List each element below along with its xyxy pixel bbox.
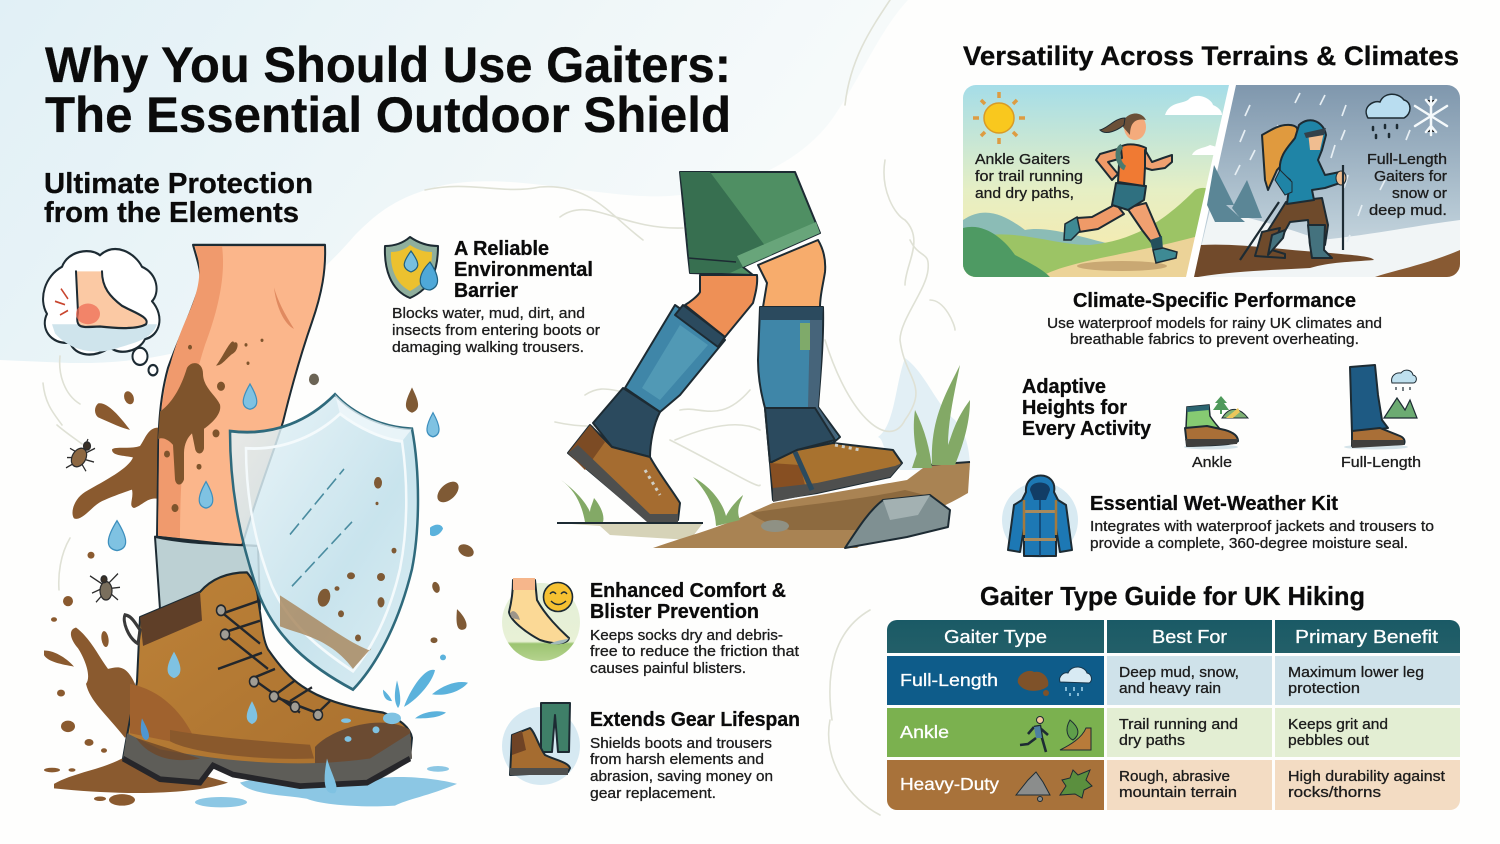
text: reliable barrier: Blocks water, mud, dirt, and	[392, 306, 585, 322]
water drops on leg	[108, 384, 439, 551]
mud splash left of leg	[72, 389, 158, 519]
insect 2	[90, 574, 120, 602]
label: ankle: Ankle	[1192, 455, 1232, 471]
text: climate performance: Use waterproof models for rainy UK climates and	[1047, 316, 1382, 332]
leg	[157, 245, 325, 546]
text: wet-weather kit: Integrates with waterproof jackets and trousers to	[1090, 519, 1434, 535]
front boot	[770, 443, 902, 502]
blue puddle	[240, 777, 457, 806]
row: ankle	[887, 708, 1460, 757]
heading: ultimate protection	[44, 168, 313, 229]
text: gear lifespan: from harsh elements and	[590, 752, 764, 768]
icon: full-length gaiter	[1344, 365, 1417, 450]
rain cloud	[1366, 94, 1410, 138]
heading: adaptive heights	[1022, 376, 1152, 440]
row: full-length: Full-Length	[900, 670, 998, 690]
illustration: muddy leg, boot and shield	[44, 245, 475, 807]
row: ankle: dry paths	[1119, 733, 1185, 749]
left panel text: Ankle Gaiters	[975, 152, 1070, 168]
title	[45, 37, 731, 143]
text: wet-weather kit	[1090, 493, 1434, 552]
left panel text: and dry paths,	[975, 186, 1074, 202]
text: comfort: free to reduce the friction that	[590, 644, 799, 660]
row: ankle: Trail running and	[1119, 717, 1238, 733]
water drops on boot	[141, 652, 401, 793]
row: heavy-duty: mountain terrain	[1119, 785, 1237, 801]
text: climate performance: breathable fabrics to prevent overheating.	[1070, 332, 1359, 348]
shorts	[680, 172, 820, 275]
row: full-length	[887, 656, 1460, 705]
table header: Best For	[1152, 626, 1227, 647]
text: reliable barrier: A Reliable	[454, 238, 549, 260]
hiker	[1240, 120, 1346, 260]
text: comfort: Blister Prevention	[590, 601, 759, 623]
ground and rock	[557, 462, 970, 548]
heading: ultimate protection: Ultimate Protection	[44, 168, 313, 200]
boot	[123, 572, 412, 786]
row: heavy-duty: Heavy-Duty	[900, 774, 999, 794]
glass shield	[230, 394, 418, 690]
front leg	[758, 240, 825, 307]
illustration: hiker legs wearing gaiters	[557, 172, 970, 548]
icon: waterproof jacket	[1002, 476, 1078, 558]
text: climate performance	[1047, 290, 1382, 348]
insect 1	[66, 439, 95, 471]
right panel text	[1367, 152, 1447, 219]
row: heavy-duty: Rough, abrasive	[1119, 769, 1230, 785]
mud on leg	[158, 339, 264, 512]
sun	[973, 92, 1025, 144]
icon: ankle gaiter	[1184, 396, 1248, 450]
icon: happy sock in green circle	[502, 578, 580, 661]
row: ankle: Ankle	[900, 722, 949, 742]
divider	[1186, 85, 1236, 277]
text: gear lifespan: Extends Gear Lifespan	[590, 709, 800, 731]
heading: adaptive heights: Heights for	[1022, 397, 1127, 419]
text: comfort: Keeps socks dry and debris-	[590, 628, 783, 644]
row: full-length: and heavy rain	[1119, 681, 1221, 697]
icon: boot and trousers in blue circle	[502, 703, 580, 785]
left scene: trail runner	[963, 85, 1233, 277]
text: comfort: causes painful blisters.	[590, 661, 746, 677]
text: comfort: Enhanced Comfort &	[590, 580, 786, 602]
row: full-length: protection	[1288, 681, 1360, 697]
heading: adaptive heights: Adaptive	[1022, 376, 1106, 398]
mud splash behind boot	[44, 552, 228, 806]
text: gear lifespan: Shields boots and trousers	[590, 736, 772, 752]
row: ankle: Keeps grit and	[1288, 717, 1388, 733]
text: climate performance: Climate-Specific Performance	[1073, 290, 1356, 312]
debris and splashes right of shield	[309, 374, 475, 643]
right panel text: deep mud.	[1369, 203, 1447, 219]
row: full-length: Maximum lower leg	[1288, 665, 1424, 681]
title: Why You Should Use Gaiters:	[45, 37, 731, 93]
back boot	[568, 425, 680, 522]
heading: ultimate protection: from the Elements	[44, 197, 299, 229]
panel: terrains and climates	[963, 85, 1460, 277]
text: reliable barrier: damaging walking trousers.	[392, 340, 584, 356]
table header: Gaiter Type	[944, 626, 1047, 647]
sock	[155, 537, 260, 609]
left panel text: for trail running	[975, 169, 1083, 185]
table: gaiter type guide	[887, 620, 1460, 810]
heading: adaptive heights: Every Activity	[1022, 418, 1152, 440]
row: heavy-duty	[887, 760, 1460, 810]
text: comfort	[590, 580, 799, 677]
runner	[1064, 114, 1177, 263]
thought bubble: sore foot	[43, 249, 159, 375]
text: reliable barrier: Barrier	[454, 280, 518, 302]
text: gear lifespan: abrasion, saving money on	[590, 769, 773, 785]
front gaiter	[758, 307, 840, 463]
text: reliable barrier: insects from entering boots or	[392, 323, 600, 339]
table header: Primary Benefit	[1295, 626, 1438, 647]
text: wet-weather kit: provide a complete, 360-degree moisture seal.	[1090, 536, 1408, 552]
icon: shield with water drops	[385, 237, 438, 298]
heading: guide table: Gaiter Type Guide for UK Hiking	[980, 581, 1365, 611]
text: gear lifespan	[590, 709, 800, 802]
row: full-length: Deep mud, snow,	[1119, 665, 1239, 681]
text: gear lifespan: gear replacement.	[590, 786, 716, 802]
label: full-length: Full-Length	[1341, 455, 1421, 471]
row: heavy-duty: High durability against	[1288, 769, 1445, 785]
right panel text: Gaiters for	[1374, 169, 1447, 185]
right scene: hiker in rain	[1194, 85, 1460, 277]
laces	[218, 601, 330, 715]
snowflake	[1415, 97, 1447, 135]
back leg	[685, 275, 757, 337]
right panel text: snow or	[1392, 186, 1447, 202]
text: reliable barrier	[392, 238, 600, 356]
left panel text	[975, 152, 1083, 202]
right panel text: Full-Length	[1367, 152, 1447, 168]
row: ankle: pebbles out	[1288, 733, 1369, 749]
table header	[887, 620, 1460, 653]
title: The Essential Outdoor Shield	[45, 87, 731, 143]
row: heavy-duty: rocks/thorns	[1288, 785, 1381, 801]
back gaiter	[593, 305, 725, 457]
grass	[561, 365, 970, 526]
text: wet-weather kit: Essential Wet-Weather Kit	[1090, 493, 1338, 515]
heading: versatility: Versatility Across Terrains & Climates	[963, 41, 1459, 71]
text: reliable barrier: Environmental	[454, 259, 593, 281]
